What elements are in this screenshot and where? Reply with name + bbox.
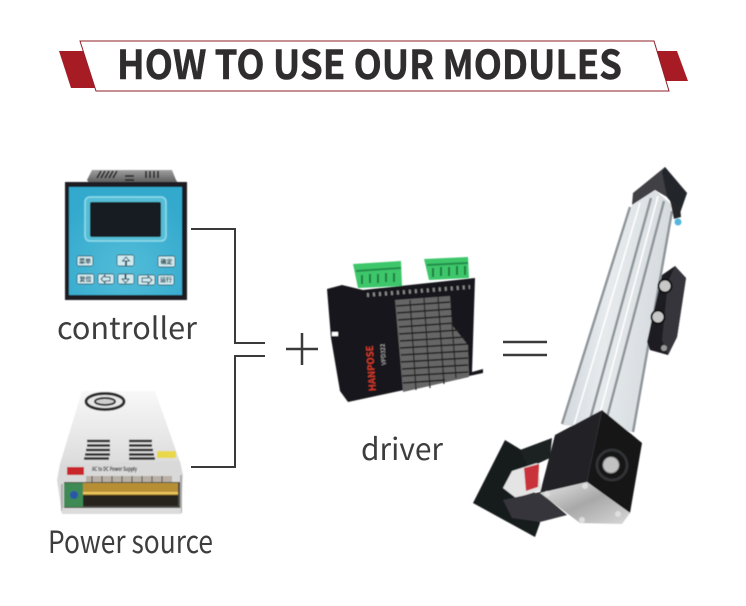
icon: controller: 菜单 xyxy=(79,256,91,266)
icon: controller: 复位 xyxy=(79,274,92,284)
icon: driver: VPD322 xyxy=(377,343,388,365)
title: HOW TO USE OUR MODULES xyxy=(117,33,622,91)
rail xyxy=(563,190,672,432)
icon: controller: 确定 xyxy=(160,257,173,266)
label: driver: driver xyxy=(361,425,443,469)
top cap xyxy=(632,167,687,213)
end block xyxy=(540,410,602,493)
icon: driver xyxy=(327,257,483,402)
icon: linear module xyxy=(473,167,687,537)
motor xyxy=(503,463,542,498)
connector lines xyxy=(191,229,265,467)
carriage xyxy=(647,266,686,355)
label: controller: controller xyxy=(57,304,197,348)
mount plate xyxy=(473,440,540,537)
label plate text: AC to DC Power Supply xyxy=(91,465,138,473)
title banner xyxy=(59,33,688,91)
plus sign xyxy=(286,333,318,365)
icon: power supply xyxy=(57,391,183,514)
equals sign xyxy=(503,342,547,355)
brand text: HANPOSE xyxy=(362,345,379,392)
icon: controller xyxy=(65,170,187,300)
icon: controller: 运行 xyxy=(160,275,172,284)
label: power source: Power source xyxy=(48,517,213,562)
